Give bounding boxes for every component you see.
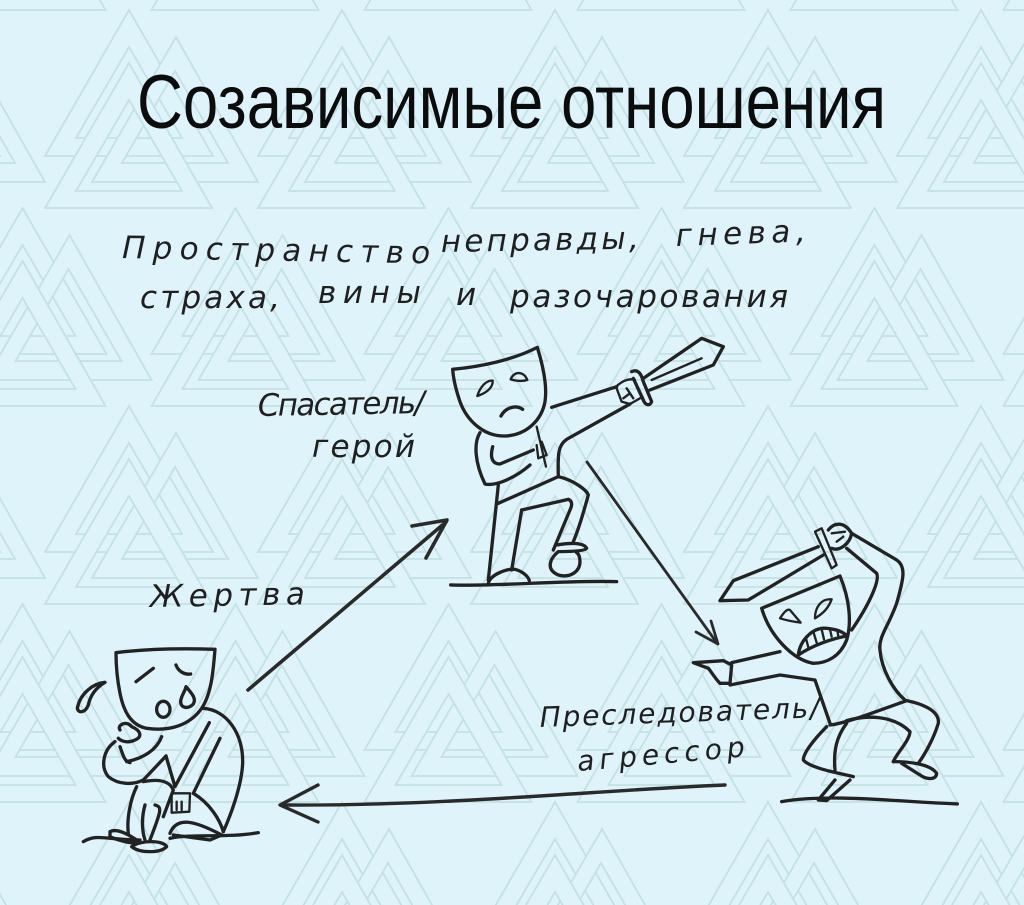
label: persecutor / aggressor — [539, 691, 823, 778]
arrow: rescuer to persecutor — [587, 462, 718, 644]
arrow: victim to rescuer — [248, 520, 447, 690]
label: persecutor / aggressor: Преследователь/ — [539, 691, 823, 734]
handwritten subtitle: неправды, — [441, 221, 639, 260]
title: Созависимые отношения — [137, 60, 886, 145]
label: rescuer / hero — [258, 385, 429, 465]
handwritten subtitle: гнева, — [675, 213, 806, 254]
figure: persecutor with raised sword — [693, 524, 957, 804]
handwritten subtitle: вины — [318, 275, 421, 311]
handwritten subtitle: страха, — [140, 280, 280, 316]
handwritten subtitle: разочарования — [509, 279, 788, 315]
label: persecutor / aggressor: агрессор — [576, 730, 746, 778]
figure: crying victim — [77, 649, 258, 852]
arrow: persecutor to victim — [280, 785, 725, 822]
label: victim: Жертва — [148, 576, 305, 615]
handwritten subtitle: и — [456, 277, 476, 313]
label: rescuer / hero: Спасатель/ — [258, 385, 429, 424]
label: rescuer / hero: герой — [312, 429, 415, 465]
handwritten subtitle: Пространство — [122, 230, 430, 271]
handwritten subtitle — [122, 213, 806, 316]
figure: rescuer with sword — [451, 338, 723, 585]
